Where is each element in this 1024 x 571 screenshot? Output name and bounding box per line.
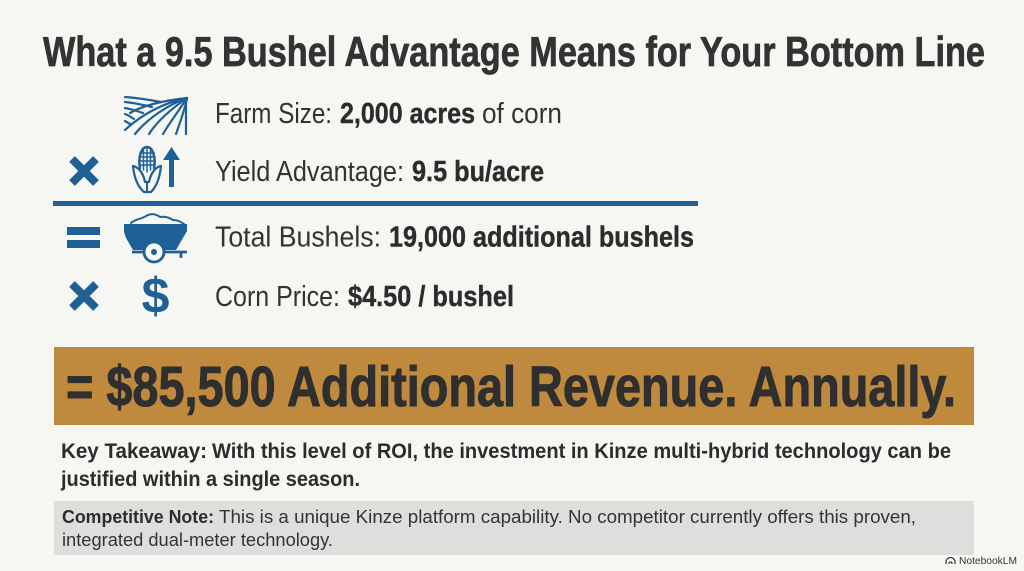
- row 3: total bushels: Total Bushels:: [215, 222, 381, 254]
- competitive note: integrated dual-meter technology.: [62, 529, 333, 550]
- divider line: [53, 201, 698, 206]
- icon: grain cart: [124, 214, 187, 262]
- row 3: total bushels: 19,000 additional bushels: [389, 222, 694, 254]
- icon: corn with up arrow: [133, 147, 180, 192]
- row 1: farm size: Farm Size:: [215, 98, 332, 130]
- row 4: corn price: [215, 281, 514, 313]
- key takeaway: With this level of ROI, the investment in Kinze multi-hybrid technology can be: [212, 440, 951, 463]
- icon: multiply sign: [72, 284, 96, 308]
- row 4: corn price: Corn Price:: [215, 281, 340, 313]
- icon: equals sign: [67, 227, 100, 248]
- competitive note: Competitive Note:: [62, 506, 214, 527]
- row 3: total bushels: [215, 222, 694, 254]
- icon: dollar sign: $: [142, 268, 170, 324]
- row 1: farm size: [215, 98, 562, 130]
- row 2: yield advantage: Yield Advantage:: [215, 156, 404, 188]
- row 2: yield advantage: [215, 156, 544, 188]
- row 2: yield advantage: 9.5 bu/acre: [412, 156, 544, 188]
- NotebookLM watermark: NotebookLM: [959, 555, 1017, 567]
- icon: farm field: [125, 97, 187, 134]
- row 4: corn price: $4.50 / bushel: [348, 281, 514, 313]
- competitive note: [54, 501, 974, 555]
- key takeaway: justified within a single season.: [60, 468, 360, 491]
- key takeaway: [60, 440, 951, 491]
- key takeaway: Key Takeaway:: [61, 440, 207, 463]
- icon: multiply sign: [72, 159, 96, 183]
- row 1: farm size: 2,000 acres: [340, 98, 475, 130]
- row 1: farm size: of corn: [482, 98, 562, 130]
- competitive note: This is a unique Kinze platform capability. No competitor currently offers this proven,: [219, 506, 916, 527]
